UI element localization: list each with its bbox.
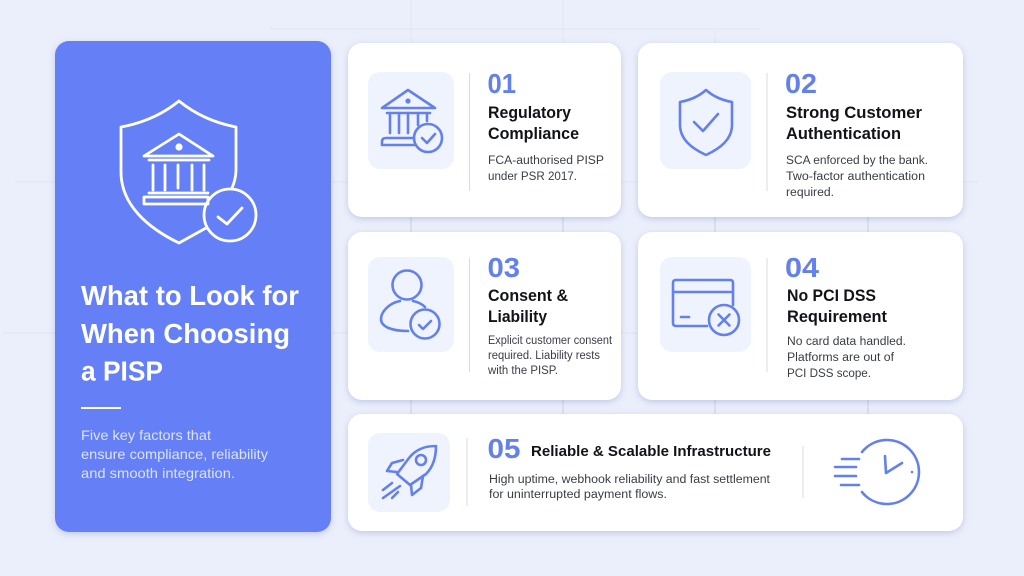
panel: card 04 no pci dss requirement: Requirement bbox=[787, 307, 887, 326]
panel: card 05 reliable and scalable infrastructure: High uptime, webhook reliability and fast settlement bbox=[489, 474, 771, 486]
panel: card 05 reliable and scalable infrastructure bbox=[348, 414, 963, 531]
panel: card 01 regulatory compliance: Compliance bbox=[488, 124, 579, 143]
panel: card 05 reliable and scalable infrastructure: 05 bbox=[488, 433, 520, 464]
panel: card 03 consent and liability: Consent & bbox=[488, 286, 568, 305]
panel: card 02 strong customer authentication: Two-factor authentication bbox=[786, 171, 925, 183]
icon: card with cross bbox=[673, 280, 739, 335]
heading: What to Look for bbox=[81, 280, 299, 311]
intro text: and smooth integration. bbox=[81, 465, 235, 481]
panel: card 03 consent and liability: Liability bbox=[488, 307, 547, 326]
panel: card 04 no pci dss requirement bbox=[638, 232, 963, 400]
panel: card 04 no pci dss requirement: 04 bbox=[785, 252, 820, 283]
panel: card 03 consent and liability: 03 bbox=[488, 252, 520, 283]
panel: card 02 strong customer authentication bbox=[638, 43, 963, 217]
panel: card 02 strong customer authentication: SCA enforced by the bank. bbox=[786, 155, 928, 167]
panel: card 05 reliable and scalable infrastructure: for uninterrupted payment flows. bbox=[489, 489, 667, 501]
icon: shield with check bbox=[680, 90, 732, 155]
icon: shield with bank and check bbox=[121, 101, 256, 243]
panel: card 04 no pci dss requirement: No card data handled. bbox=[787, 336, 906, 348]
panel: card 03 consent and liability: required. Liability rests bbox=[488, 350, 600, 362]
panel: card 01 regulatory compliance: Regulatory bbox=[488, 103, 572, 122]
icon: bank with check bbox=[382, 90, 442, 152]
panel: card 02 strong customer authentication: Strong Customer bbox=[786, 103, 922, 122]
icon: person with check bbox=[381, 270, 440, 338]
panel: card 04 no pci dss requirement: Platforms are out of bbox=[787, 352, 895, 364]
panel: card 01 regulatory compliance bbox=[348, 43, 621, 217]
panel: card 02 strong customer authentication: Authentication bbox=[786, 124, 901, 143]
panel: card 05 reliable and scalable infrastructure: Reliable & Scalable Infrastructure bbox=[531, 443, 771, 460]
panel: card 02 strong customer authentication: 02 bbox=[785, 68, 817, 99]
panel: card 01 regulatory compliance: under PSR 2017. bbox=[488, 171, 577, 183]
panel: card 03 consent and liability: Explicit customer consent bbox=[488, 335, 613, 347]
heading bbox=[81, 280, 299, 386]
panel: card 01 regulatory compliance: FCA-authorised PISP bbox=[488, 155, 604, 167]
panel: card 04 no pci dss requirement: PCI DSS scope. bbox=[787, 368, 871, 380]
panel: card 01 regulatory compliance: 01 bbox=[488, 68, 516, 99]
heading: When Choosing bbox=[81, 318, 290, 349]
panel: card 03 consent and liability: with the PISP. bbox=[487, 365, 558, 377]
intro text bbox=[81, 427, 268, 481]
panel: card 02 strong customer authentication: required. bbox=[786, 187, 834, 199]
panel: card 04 no pci dss requirement: No PCI DSS bbox=[787, 286, 876, 305]
panel: intro bbox=[55, 41, 331, 532]
intro text: Five key factors that bbox=[81, 427, 211, 443]
icon: rocket bbox=[383, 446, 436, 498]
intro text: ensure compliance, reliability bbox=[81, 446, 268, 462]
heading: a PISP bbox=[81, 356, 163, 386]
panel: card 03 consent and liability bbox=[348, 232, 621, 400]
icon: fast clock bbox=[835, 440, 919, 504]
